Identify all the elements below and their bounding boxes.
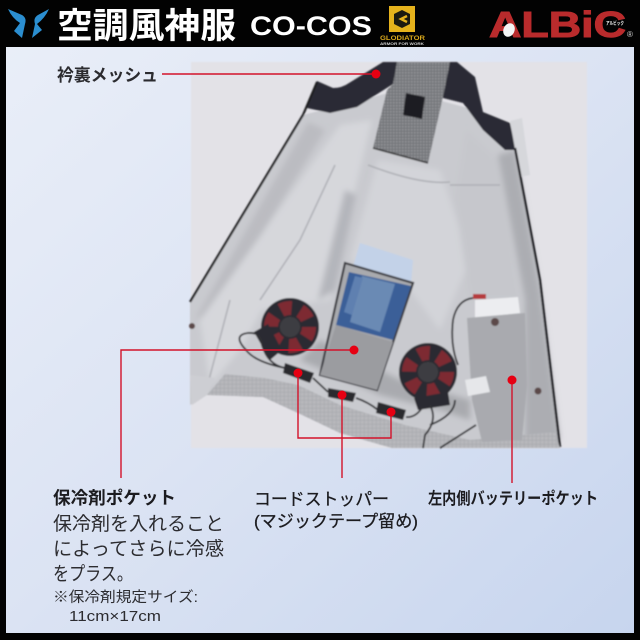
logo: ALBiC: アルビック — [606, 20, 624, 27]
cold pack: packaging top — [352, 243, 413, 285]
callout lines and dots — [121, 70, 516, 483]
photo: jacket product photo — [189, 62, 587, 448]
battery pack — [475, 297, 520, 318]
callout: collar mesh leader — [162, 70, 380, 78]
label: cord stopper — [254, 490, 418, 531]
jacket shell — [190, 90, 560, 448]
description lines: 保冷剤を入れること — [53, 513, 224, 535]
zipper: right edge — [515, 148, 560, 447]
callout: outer cord stoppers leader — [294, 368, 396, 438]
collar adjuster tab — [510, 118, 530, 177]
facing: right strip — [498, 150, 560, 440]
logo: Gladiator: ARMOR FOR WORK — [380, 42, 425, 46]
label: cord stopper: コードストッパー — [254, 490, 389, 509]
velcro stopper left — [283, 363, 314, 383]
lining soft tones — [195, 120, 560, 440]
mesh pocket: bag body — [320, 263, 413, 390]
icon: blue wind chevrons — [8, 9, 49, 38]
cold pack: blue panel — [336, 272, 411, 340]
text block: coolant pocket — [53, 488, 224, 625]
description lines — [53, 513, 224, 585]
lining: left bright — [200, 120, 372, 385]
description lines: をプラス。 — [53, 563, 133, 585]
description lines: によってさらに冷感 — [53, 538, 224, 560]
header bar — [8, 4, 633, 46]
logo: ALBiC: ALBiC — [489, 4, 626, 45]
fold shadow: center left — [318, 190, 356, 300]
note: coolant size: ※保冷剤規定サイズ: — [53, 589, 198, 606]
hem: ribbed waistband — [207, 374, 560, 448]
pocket button — [491, 318, 499, 326]
yoke: dark collar lining — [307, 62, 516, 150]
photo backdrop — [191, 62, 587, 448]
title: product name: 空調風神服 — [57, 7, 236, 46]
lining: back panel — [350, 160, 470, 330]
mesh bottom zipper — [373, 148, 428, 163]
fold lines — [205, 165, 500, 395]
jacket illustration — [189, 62, 560, 448]
label: collar tag — [403, 93, 425, 119]
note: coolant size — [53, 589, 198, 625]
callout: center cord stopper leader — [338, 390, 346, 478]
fan: right fan unit — [399, 343, 457, 410]
fan: left fan unit — [254, 298, 319, 360]
heading: coolant pocket: 保冷剤ポケット — [53, 488, 176, 508]
cables — [239, 298, 476, 448]
label: cord stopper: (マジックテープ留め) — [254, 512, 418, 531]
cold pack: light stripes — [350, 276, 395, 332]
mesh: collar mesh panel — [373, 62, 450, 163]
shadow under pocket and fans — [300, 340, 470, 420]
label: left inner battery pocket: 左内側バッテリーポケット — [428, 488, 598, 508]
battery pocket — [467, 313, 527, 442]
care label — [465, 376, 490, 396]
logo: ALBiC: ® — [627, 30, 633, 39]
velcro stopper right — [376, 402, 406, 420]
sleeve button right — [534, 388, 542, 394]
zipper: left edge — [190, 82, 317, 302]
note: coolant size: 11cm×17cm — [69, 609, 161, 625]
callout: coolant pocket leader — [121, 346, 358, 478]
battery plug — [473, 294, 486, 299]
title: model name: CO-COS — [250, 11, 372, 41]
velcro stopper center — [328, 388, 356, 402]
sleeve cuff — [190, 375, 215, 405]
sleeve button left — [189, 323, 195, 329]
label: collar mesh: 衿裏メッシュ — [57, 65, 158, 85]
callout: battery pocket leader — [508, 376, 516, 483]
cold pack: pale stripe — [344, 276, 363, 315]
mesh pocket: lower pouch — [320, 325, 393, 390]
lining: right panel — [455, 130, 520, 300]
logo: Gladiator: GLODIATOR — [380, 36, 426, 42]
facing: left strip — [195, 122, 325, 320]
logo: Gladiator — [380, 6, 426, 46]
